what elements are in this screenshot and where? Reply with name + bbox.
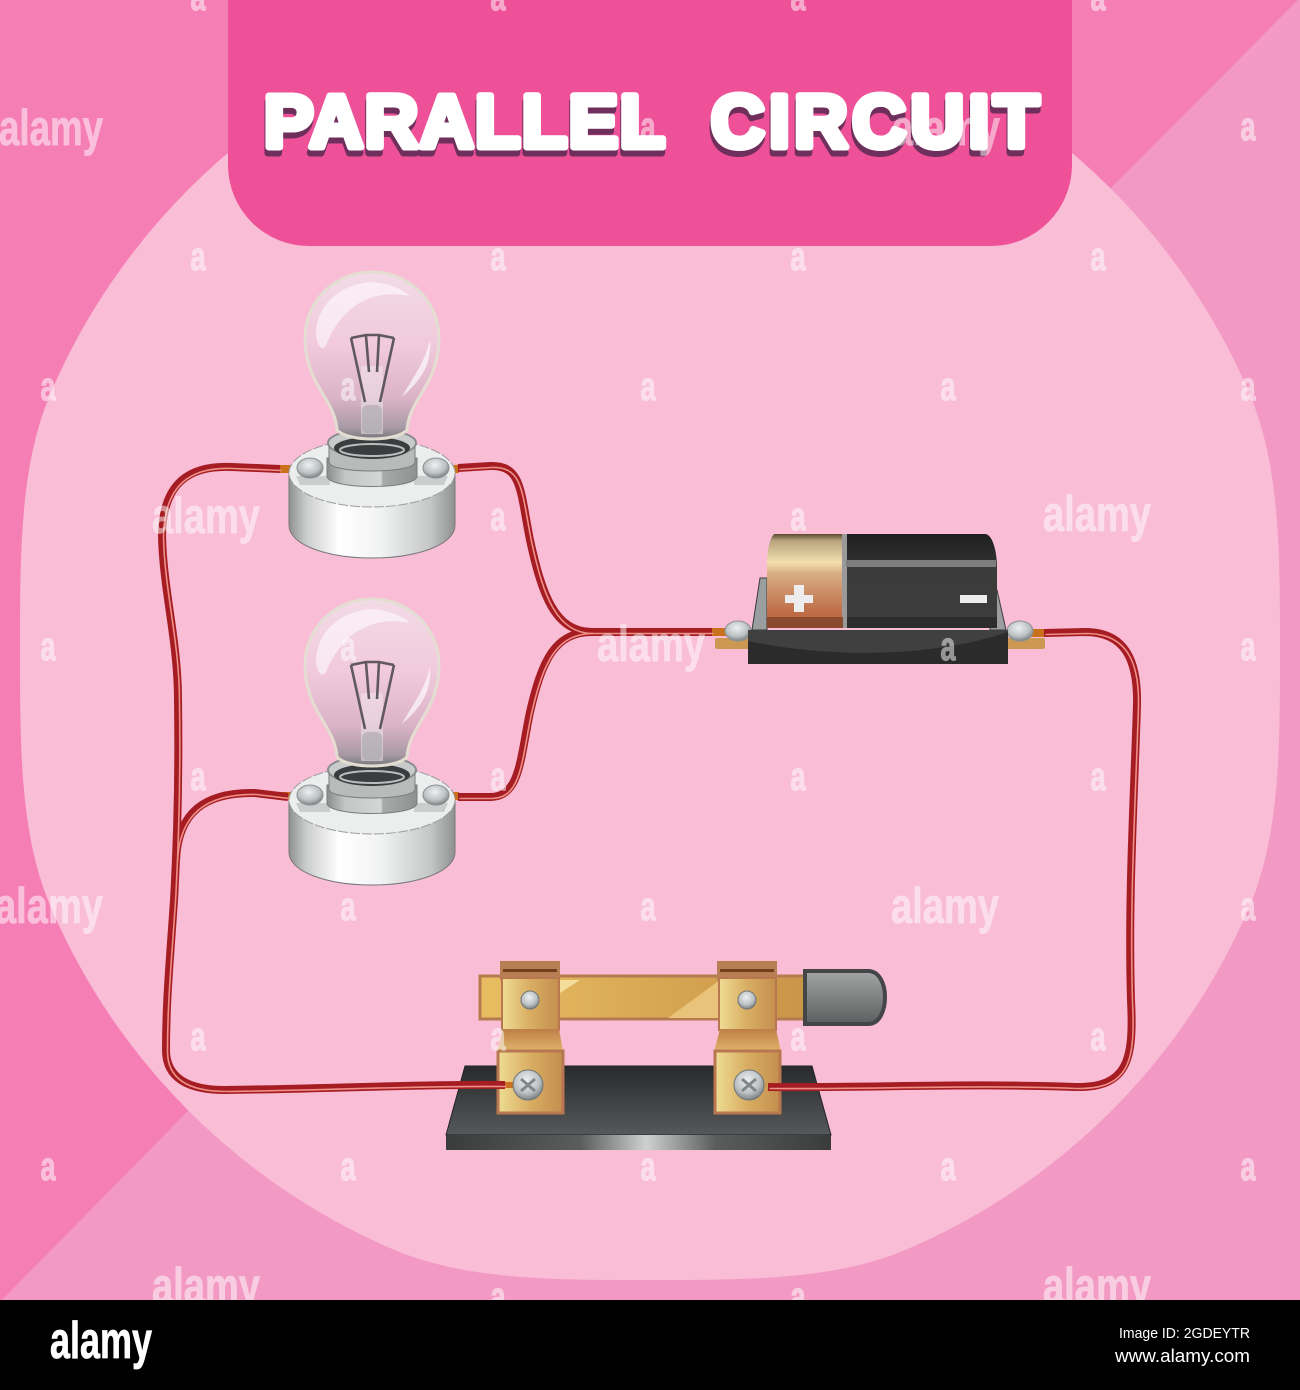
watermarks: alamy <box>891 878 999 934</box>
watermarks: a <box>940 625 956 669</box>
watermarks: alamy <box>0 100 103 156</box>
watermarks: a <box>490 1275 506 1319</box>
watermarks: a <box>790 235 806 279</box>
watermarks: a <box>490 755 506 799</box>
lower light bulb <box>278 599 459 885</box>
battery negative body <box>844 534 997 628</box>
watermarks: alamy <box>152 488 260 544</box>
watermarks: a <box>790 755 806 799</box>
plus sign <box>785 585 813 612</box>
watermarks: a <box>940 365 956 409</box>
bulb base <box>289 439 455 558</box>
watermarks: a <box>340 625 356 669</box>
watermarks: alamy <box>1043 486 1151 542</box>
minus sign <box>960 595 987 603</box>
left wire contact <box>503 1082 515 1088</box>
watermarks: a <box>640 885 656 929</box>
watermarks: a <box>1240 625 1256 669</box>
watermarks: a <box>1240 885 1256 929</box>
watermarks: a <box>190 755 206 799</box>
watermarks: a <box>40 365 56 409</box>
title: CIRCUIT <box>710 86 1038 169</box>
title: PARALLEL <box>264 80 665 163</box>
watermarks: a <box>1240 105 1256 149</box>
watermarks: a <box>490 235 506 279</box>
watermarks: a <box>40 1145 56 1189</box>
watermarks: a <box>190 235 206 279</box>
bulb glass <box>305 272 439 439</box>
website: www.alamy.com <box>1114 1346 1250 1366</box>
watermarks: a <box>490 495 506 539</box>
wires <box>162 466 1139 1091</box>
battery terminals <box>710 621 1045 649</box>
title: CIRCUIT <box>711 80 1039 163</box>
bulb copper contacts <box>278 465 459 473</box>
watermarks: a <box>1240 365 1256 409</box>
watermarks: a <box>790 495 806 539</box>
watermarks: a <box>1090 755 1106 799</box>
watermarks: a <box>790 1015 806 1059</box>
watermarks: a <box>190 1015 206 1059</box>
watermarks: alamy <box>152 1258 260 1314</box>
top light bulb <box>278 272 459 558</box>
battery contacts <box>752 578 1006 630</box>
title: PARALLEL <box>263 86 664 169</box>
battery <box>710 534 1045 664</box>
watermarks: alamy <box>597 616 705 672</box>
switch board <box>446 1066 831 1150</box>
switch handle <box>805 971 885 1024</box>
watermarks: a <box>340 885 356 929</box>
watermarks: a <box>1090 235 1106 279</box>
watermarks: alamy <box>1043 1258 1151 1314</box>
footer logo: alamy <box>50 1312 152 1370</box>
battery positive end <box>767 534 843 628</box>
watermarks: a <box>40 625 56 669</box>
watermarks: a <box>640 1145 656 1189</box>
bulb collar <box>327 429 417 486</box>
footer bar <box>0 1300 1300 1390</box>
title <box>263 80 1039 169</box>
knife switch <box>446 961 885 1150</box>
switch screws <box>513 991 764 1100</box>
watermarks: a <box>340 1145 356 1189</box>
right bracket <box>714 961 781 1113</box>
watermarks: alamy <box>892 100 1000 156</box>
watermarks: a <box>490 1015 506 1059</box>
left bracket <box>497 961 563 1113</box>
watermarks: a <box>1090 1015 1106 1059</box>
watermarks: a <box>1240 1145 1256 1189</box>
switch blade <box>480 976 806 1019</box>
watermarks: a <box>340 365 356 409</box>
battery holder <box>748 630 1008 664</box>
watermarks: a <box>640 365 656 409</box>
title banner <box>228 0 1072 246</box>
watermarks: a <box>940 1145 956 1189</box>
watermarks: a <box>790 1275 806 1319</box>
image id: Image ID: 2GDEYTR <box>1119 1325 1250 1342</box>
watermarks: a <box>640 105 656 149</box>
